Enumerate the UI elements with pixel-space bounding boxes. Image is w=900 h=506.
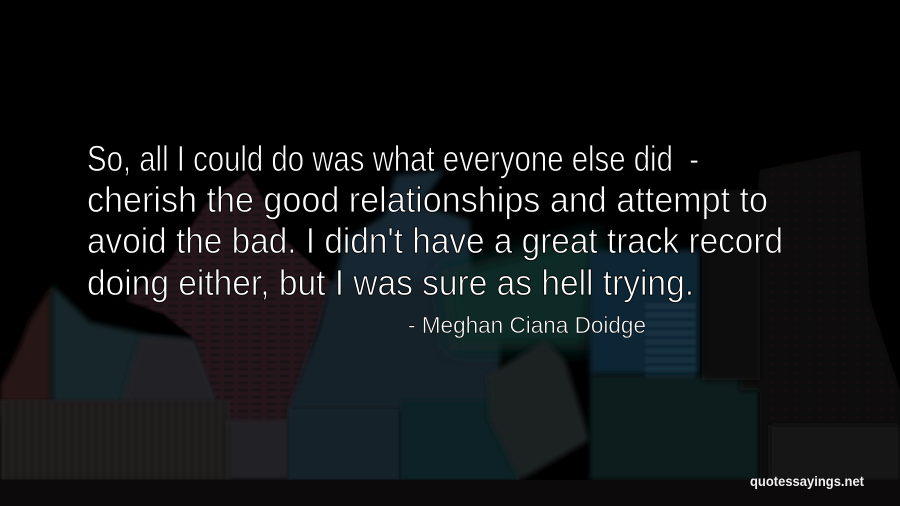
scene: lower right grey band — [770, 425, 900, 480]
author attribution: - Meghan Ciana Doidge — [408, 312, 646, 338]
scene: centre blue-grey block — [288, 282, 500, 410]
quote line 2: cherish the good relationships and attempt to — [87, 179, 768, 220]
scene: lower teal right — [590, 375, 760, 480]
scene: grey rock — [488, 340, 590, 480]
quote line 1: So, all I could do was what everyone else did - — [87, 138, 699, 179]
scene: dark teal band — [400, 400, 520, 480]
watermark: quotessayings.net — [750, 473, 864, 489]
scene: lower left striped band — [0, 400, 230, 480]
scene: brick pyramid — [125, 172, 332, 425]
scene: grey slope — [120, 336, 228, 425]
scene: lower centre pale block — [228, 420, 290, 480]
scene: left teal block — [52, 285, 230, 425]
quote line 4: doing either, but I was sure as hell trying. — [87, 262, 694, 303]
scene: lower teal band — [288, 408, 400, 480]
scene: blue building — [590, 250, 700, 375]
scene: windowed tower — [645, 300, 695, 380]
scene: black column — [702, 190, 760, 380]
quote line 3: avoid the bad. I didn't have a great track record — [87, 220, 783, 261]
scene: ground strip — [0, 480, 900, 506]
scene: green foliage — [440, 230, 600, 350]
scene: left red wall — [0, 285, 52, 415]
quote text — [87, 138, 783, 303]
scene: dark brown right side — [740, 150, 900, 480]
scene: pale figure top — [330, 170, 472, 300]
